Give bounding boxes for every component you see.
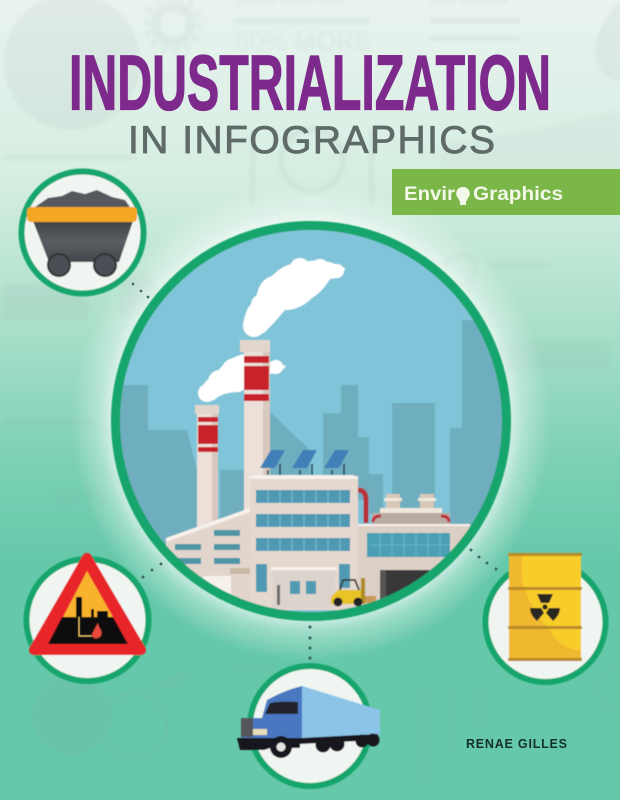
icon: coal cart (22, 172, 144, 294)
faded background infographics: 12-14 (235, 659, 276, 676)
icon: lightbulb (456, 187, 470, 205)
flame (92, 623, 102, 638)
series banner (392, 169, 620, 215)
city skyline (120, 320, 502, 545)
barrel highlight (522, 555, 581, 650)
connector dots: truck to centre (308, 625, 312, 660)
chassis (237, 734, 378, 750)
red triangle (34, 558, 141, 650)
barrel body (509, 554, 581, 660)
derrick and pipe (76, 597, 108, 617)
main building (250, 476, 358, 610)
windshield (265, 702, 298, 714)
barrel circle (486, 562, 606, 682)
front wheel (270, 736, 292, 758)
left wing (166, 508, 250, 610)
coal pile (35, 190, 130, 207)
faded background infographics: 50% MORE (235, 26, 372, 56)
icon: truck (237, 666, 380, 786)
white glow behind main circle (71, 181, 551, 661)
headlight (253, 729, 267, 735)
cart wheels (48, 254, 116, 276)
smoke lower (198, 354, 286, 402)
short chimney (195, 405, 219, 537)
author name: RENAE GILLES (466, 737, 567, 751)
tall chimney (240, 340, 270, 510)
cab (241, 686, 302, 738)
icon: warning sign (26, 558, 148, 681)
black ground (48, 617, 128, 644)
warning circle (26, 559, 148, 681)
truck circle (250, 666, 370, 786)
solar panels (254, 450, 354, 477)
central factory illustration (110, 220, 515, 622)
series name continued: Graphics (473, 184, 563, 205)
connector dots: warning to centre (142, 562, 162, 578)
grille (241, 718, 253, 737)
sky (123, 230, 474, 612)
rear wheels (316, 734, 380, 752)
radiation symbol (530, 594, 560, 621)
entrance (271, 567, 337, 608)
coal cart circle (22, 172, 144, 294)
connector dots: barrel to centre (470, 548, 498, 570)
connector dots: coal to centre (132, 283, 149, 298)
main circle ring (116, 226, 506, 616)
right rooftop structure (372, 494, 450, 526)
fracking pipe (79, 617, 92, 636)
yellow sky (63, 571, 113, 617)
faded background infographics: 50-75 (55, 488, 106, 510)
trailer (302, 686, 380, 738)
series name: Envir (404, 184, 456, 205)
cart rim (27, 207, 137, 222)
smoke upper (243, 258, 345, 337)
right wing (358, 524, 470, 610)
cart body (33, 221, 133, 262)
icon: radioactive barrel (486, 553, 606, 682)
barrel rings (508, 553, 582, 661)
forklift (331, 578, 376, 606)
subtitle: IN INFOGRAPHICS (128, 119, 495, 162)
red pipe (358, 490, 366, 523)
